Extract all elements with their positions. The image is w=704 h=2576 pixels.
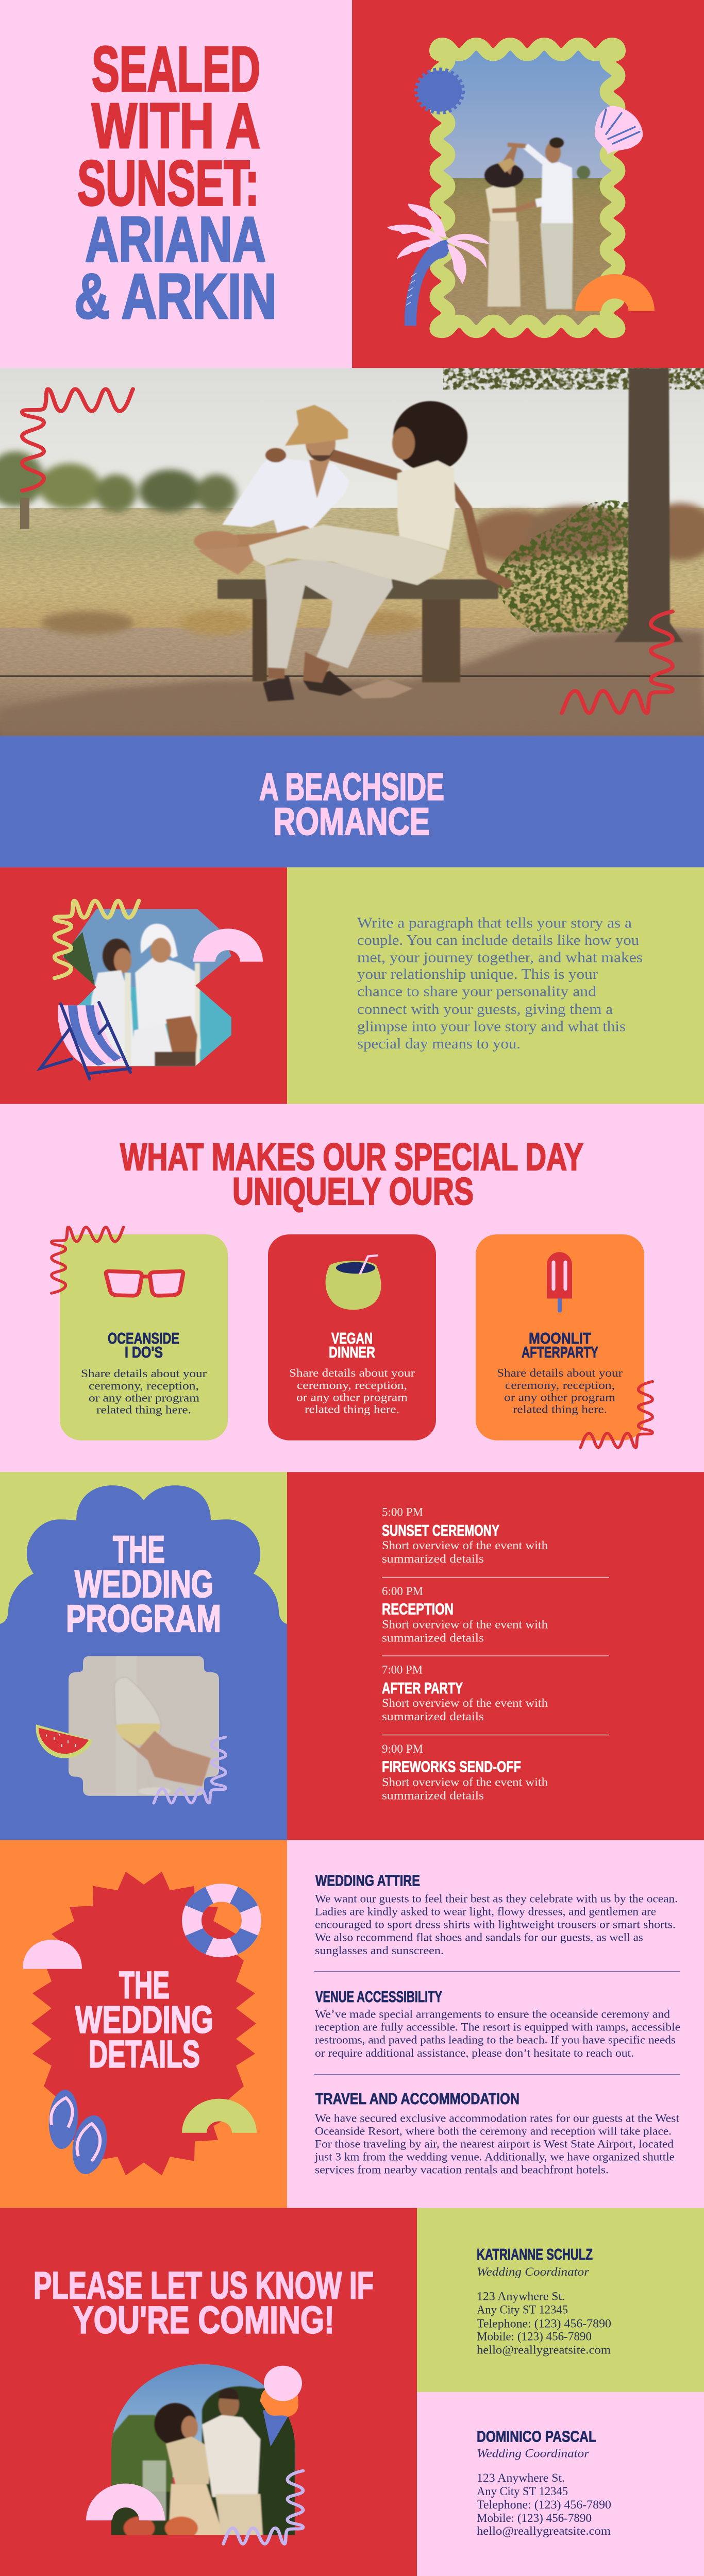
heading: YOU'RE COMING! [73,2299,334,2342]
photo: hand holding champagne glass [67,1653,222,1797]
schedule item: sunset ceremony: 5:00 PM [382,1506,423,1519]
card text: ceremony, reception, [505,1379,615,1392]
schedule item: fireworks send-off: Short overview of the event with [382,1776,548,1789]
contact details: hello@reallygreatsite.com [477,2525,611,2538]
title: & ARKIN [74,261,277,332]
card title: DINNER [329,1343,375,1361]
detail: travel and accommodation: For those traveling by air, the nearest airport is West State Airport, located [315,2138,674,2150]
icon: pink arch [86,2483,165,2520]
panel: wedding details heading [0,1840,287,2208]
panel: wedding program heading [0,1472,287,1840]
schedule item: after party [382,1664,548,1723]
card text: ceremony, reception, [297,1379,407,1392]
heading: ROMANCE [274,801,430,843]
contact details: 123 Anywhere St. [477,2472,565,2485]
detail: venue accessibility: restrooms, and paved paths leading to the beach. If you have specific needs [315,2033,676,2046]
icon: flip-flops [47,2089,111,2177]
detail: wedding attire: Ladies are kindly asked to wear light, flowy dresses, and gentlemen are [315,1905,656,1918]
card text [81,1367,207,1416]
icon: squiggle top left [52,1227,124,1293]
heading [66,1528,221,1640]
panel: story text [287,867,704,1104]
contact details: Telephone: (123) 456-7890 [477,2317,611,2330]
detail: wedding attire: sunglasses and sunscreen. [315,1944,444,1957]
title: SEALED [92,34,260,105]
schedule item: fireworks send-off: 9:00 PM [382,1743,423,1756]
card: moonlit afterparty [476,1234,644,1440]
panel: a beachside romance banner [0,736,704,867]
panel: full-width couple photo [0,368,704,736]
icon: lilac squiggle [154,1737,226,1803]
heading [33,2264,374,2342]
card text: or any other program [504,1391,615,1404]
card text: related thing here. [96,1403,191,1416]
contact details: Any City ST 12345 [477,2303,568,2316]
card text: related thing here. [513,1403,607,1416]
card text: Share details about your [497,1367,623,1380]
heading [75,1964,213,2076]
contact details [477,2447,611,2538]
card title: OCEANSIDE [108,1329,179,1347]
starburst shape [31,1872,256,2175]
card text: or any other program [89,1392,199,1404]
contact details [477,2266,611,2357]
icon: green arch [182,2099,257,2133]
detail: wedding attire [315,1872,678,1957]
card title: I DO'S [125,1343,163,1361]
contact details: hello@reallygreatsite.com [477,2344,611,2357]
schedule item: after party: Short overview of the event with [382,1697,548,1710]
icon: watermelon slice [36,1724,93,1758]
panel: rsvp [0,2208,417,2576]
title: WITH A [92,91,260,161]
contact name: DOMINICO PASCAL [477,2428,596,2445]
icon: striped deck chair [40,1003,130,1079]
card title: VEGAN [331,1329,373,1347]
panel: wedding schedule [287,1472,704,1840]
icon: ice cream cone [260,2366,302,2447]
icon: red squiggle top left [22,389,133,490]
text block: story paragraph: couple. You can include details like how you [357,932,639,948]
contact details: Mobile: (123) 456-7890 [477,2512,592,2525]
detail: travel and accommodation: We have secured exclusive accommodation rates for our guests at the West [315,2112,680,2125]
tree foliage [443,368,704,389]
heading: A BEACHSIDE [259,766,444,808]
schedule item: sunset ceremony: Short overview of the event with [382,1539,548,1552]
text block: story paragraph: Write a paragraph that tells your story as a [357,915,632,931]
heading [259,766,444,843]
schedule item: fireworks send-off [382,1743,548,1802]
card title: MOONLIT [529,1329,591,1347]
panel: what makes our special day [0,1104,704,1472]
detail: travel and accommodation [314,2090,680,2177]
icon: red squiggle bottom right [562,612,673,713]
panel: wedding details text [287,1840,704,2208]
text block: story paragraph: connect with your guests, giving them a [357,1001,613,1018]
contact details: Wedding Coordinator [477,2447,590,2460]
photo: couple dancing in field [443,50,611,325]
text block: story paragraph: met, your journey together, and what makes [357,950,643,965]
card title [522,1329,598,1361]
text block: story paragraph [357,915,643,1052]
schedule item: after party: AFTER PARTY [382,1679,463,1697]
icon: coconut drink [326,1256,381,1310]
card title: AFTERPARTY [522,1343,598,1361]
icon: sunglasses [106,1271,183,1296]
contact details: Mobile: (123) 456-7890 [477,2330,592,2343]
title [74,34,277,332]
icon: orange arch [575,274,655,311]
icon: popsicle [547,1252,572,1312]
heading: UNIQUELY OURS [232,1171,474,1213]
card text: related thing here. [305,1403,399,1416]
schedule item: fireworks send-off: FIREWORKS SEND-OFF [382,1757,521,1775]
schedule item: reception: Short overview of the event with [382,1618,548,1631]
card title [329,1329,375,1361]
panel: story photo [0,867,287,1104]
heading: PLEASE LET US KNOW IF [33,2264,374,2307]
detail: venue accessibility: VENUE ACCESSIBILITY [315,1988,442,2006]
detail: venue accessibility: reception are fully accessible. The resort is equipped with ramps, accessible [315,2021,680,2033]
icon: pink dome [23,1940,82,1969]
card: vegan dinner [268,1234,436,1440]
scalloped cloud shape [0,1485,287,1840]
detail: wedding attire: WEDDING ATTIRE [315,1872,420,1889]
shrub [495,500,631,633]
panel: contact dominico pascal [417,2392,704,2576]
schedule item: sunset ceremony [382,1506,548,1566]
detail: wedding attire: We want our guests to feel their best as they celebrate with us by the ocean. [315,1892,678,1905]
schedule item: reception: 6:00 PM [382,1585,423,1598]
schedule item: sunset ceremony: SUNSET CEREMONY [382,1521,499,1539]
detail: venue accessibility: We’ve made special arrangements to ensure the oceanside ceremony and [315,2008,670,2021]
schedule item: after party: summarized details [382,1710,484,1723]
icon: green wavy frame [436,44,618,332]
card title [108,1329,179,1361]
heading: THE [119,1964,170,2007]
card text: or any other program [296,1391,408,1404]
card text [497,1367,623,1416]
detail: wedding attire: encouraged to sport dress shirts with lightweight trousers or smart shorts. [315,1918,676,1931]
panel: contact katrianne schulz [417,2208,704,2392]
contact details: Any City ST 12345 [477,2485,568,2498]
card text: Share details about your [289,1367,415,1380]
detail: travel and accommodation: TRAVEL AND ACCOMMODATION [315,2090,519,2108]
schedule item: reception [382,1585,548,1645]
detail: travel and accommodation: just 3 km from the wedding venue. Additionally, we have organized shuttle [314,2150,675,2163]
heading: WEDDING [75,1998,213,2041]
schedule item: sunset ceremony: summarized details [382,1553,484,1566]
card text [289,1367,415,1416]
detail: travel and accommodation: Oceanside Resort, where both the ceremony and reception will take place. [315,2125,672,2138]
icon: yellow squiggle [55,901,139,978]
schedule item: reception: summarized details [382,1632,484,1645]
detail: venue accessibility: or require additional assistance, please don’t hesitate to reach out. [315,2047,634,2060]
contact details: Telephone: (123) 456-7890 [477,2499,611,2512]
icon: squiggle bottom right [580,1382,652,1448]
title: SUNSET: [77,148,259,219]
heading [120,1136,583,1213]
card text: Share details about your [81,1367,207,1380]
icon: lifebuoy [182,1884,261,1957]
icon: lilac squiggle [223,2471,303,2544]
heading: PROGRAM [66,1597,221,1640]
photo: couple walking outdoors [108,2362,299,2539]
title: ARIANA [85,204,266,275]
heading: THE [113,1528,165,1571]
detail: venue accessibility [315,1988,680,2060]
schedule item: reception: RECEPTION [382,1600,454,1618]
heading: WEDDING [75,1563,213,1605]
icon: seashell [595,106,643,154]
contact name: KATRIANNE SCHULZ [477,2245,593,2263]
card: oceanside i do's [60,1234,228,1440]
photo: couple in white robes [52,906,237,1069]
text block: story paragraph: your relationship unique. This is your [357,966,598,982]
icon: pink arch [193,928,263,962]
panel: hero photo [352,0,704,368]
detail: travel and accommodation: services from nearby vacation rentals and beachfront hotels. [315,2163,609,2177]
contact details: Wedding Coordinator [477,2266,590,2279]
detail: wedding attire: We also recommend flat shoes and sandals for our guests, as well as [315,1931,643,1944]
schedule item: after party: 7:00 PM [382,1664,423,1676]
text block: story paragraph: special day means to you. [357,1036,521,1052]
heading: DETAILS [89,2033,200,2076]
contact details: 123 Anywhere St. [477,2290,565,2303]
icon: palm tree [387,204,490,326]
schedule item: fireworks send-off: summarized details [382,1789,484,1802]
icon: blue sunburst [417,71,462,112]
text block: story paragraph: chance to share your personality and [357,984,596,999]
panel: hero title [0,0,352,368]
text block: story paragraph: glimpse into your love story and what this [357,1018,626,1035]
card text: ceremony, reception, [89,1380,199,1393]
